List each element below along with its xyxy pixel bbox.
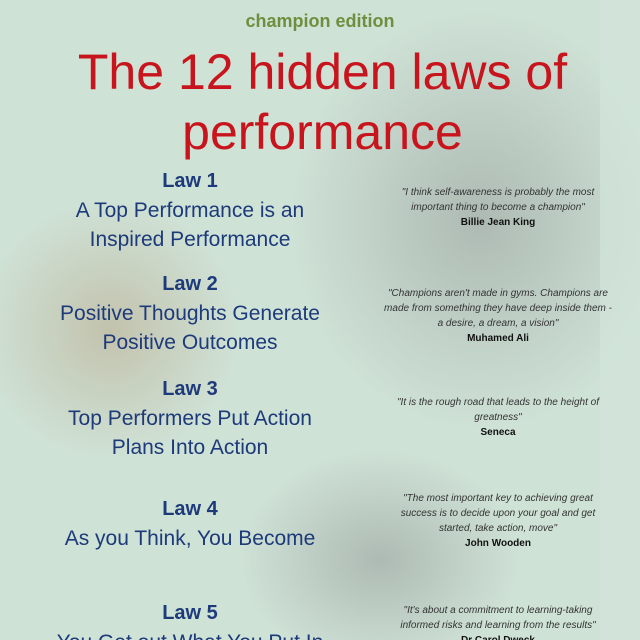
- law 3: [68, 378, 312, 459]
- quote 5: informed risks and learning from the results": [400, 620, 596, 631]
- law 1: [76, 170, 304, 251]
- title: performance: [182, 104, 463, 160]
- quote 3: greatness": [474, 412, 522, 423]
- law 2: [60, 273, 320, 354]
- law 2: Positive Outcomes: [102, 331, 278, 354]
- title: The 12 hidden laws of: [78, 44, 567, 100]
- quote 4: started, take action, move": [439, 523, 557, 534]
- quote 2: "Champions aren't made in gyms. Champions are: [388, 288, 608, 299]
- quote 4: John Wooden: [465, 538, 531, 549]
- quote 5: [400, 605, 596, 640]
- law 1: Inspired Performance: [90, 228, 290, 251]
- quote 4: "The most important key to achieving great: [403, 493, 593, 504]
- law 2: Positive Thoughts Generate: [60, 302, 320, 325]
- law 5: Law 5: [162, 602, 218, 624]
- quote 2: Muhamed Ali: [467, 333, 529, 344]
- quote 1: important thing to become a champion": [411, 202, 585, 213]
- law 3: Law 3: [162, 378, 218, 400]
- quote 2: a desire, a dream, a vision": [438, 318, 558, 329]
- quote 3: Seneca: [480, 427, 516, 438]
- law 4: Law 4: [162, 498, 218, 520]
- law 1: A Top Performance is an: [76, 199, 304, 222]
- quote 1: "I think self-awareness is probably the most: [402, 187, 594, 198]
- law 4: As you Think, You Become: [65, 527, 315, 550]
- quote 1: Billie Jean King: [461, 217, 535, 228]
- subtitle: champion edition: [245, 11, 394, 31]
- quote 5: "It's about a commitment to learning-taking: [404, 605, 592, 616]
- quote 3: "It is the rough road that leads to the height of: [397, 397, 599, 408]
- law 5: [57, 602, 323, 640]
- title: [78, 44, 568, 160]
- quote 2: [384, 288, 612, 344]
- quote 4: success is to decide upon your goal and get: [401, 508, 595, 519]
- quote 1: [402, 187, 595, 228]
- quote 2: made from something they have deep inside them -: [384, 303, 612, 314]
- law 1: Law 1: [162, 170, 218, 192]
- quote 4: [400, 493, 596, 549]
- law 2: Law 2: [162, 273, 218, 295]
- quote 3: [397, 397, 600, 438]
- law 3: Plans Into Action: [112, 436, 268, 459]
- law 4: [64, 498, 315, 550]
- law 3: Top Performers Put Action: [68, 407, 312, 430]
